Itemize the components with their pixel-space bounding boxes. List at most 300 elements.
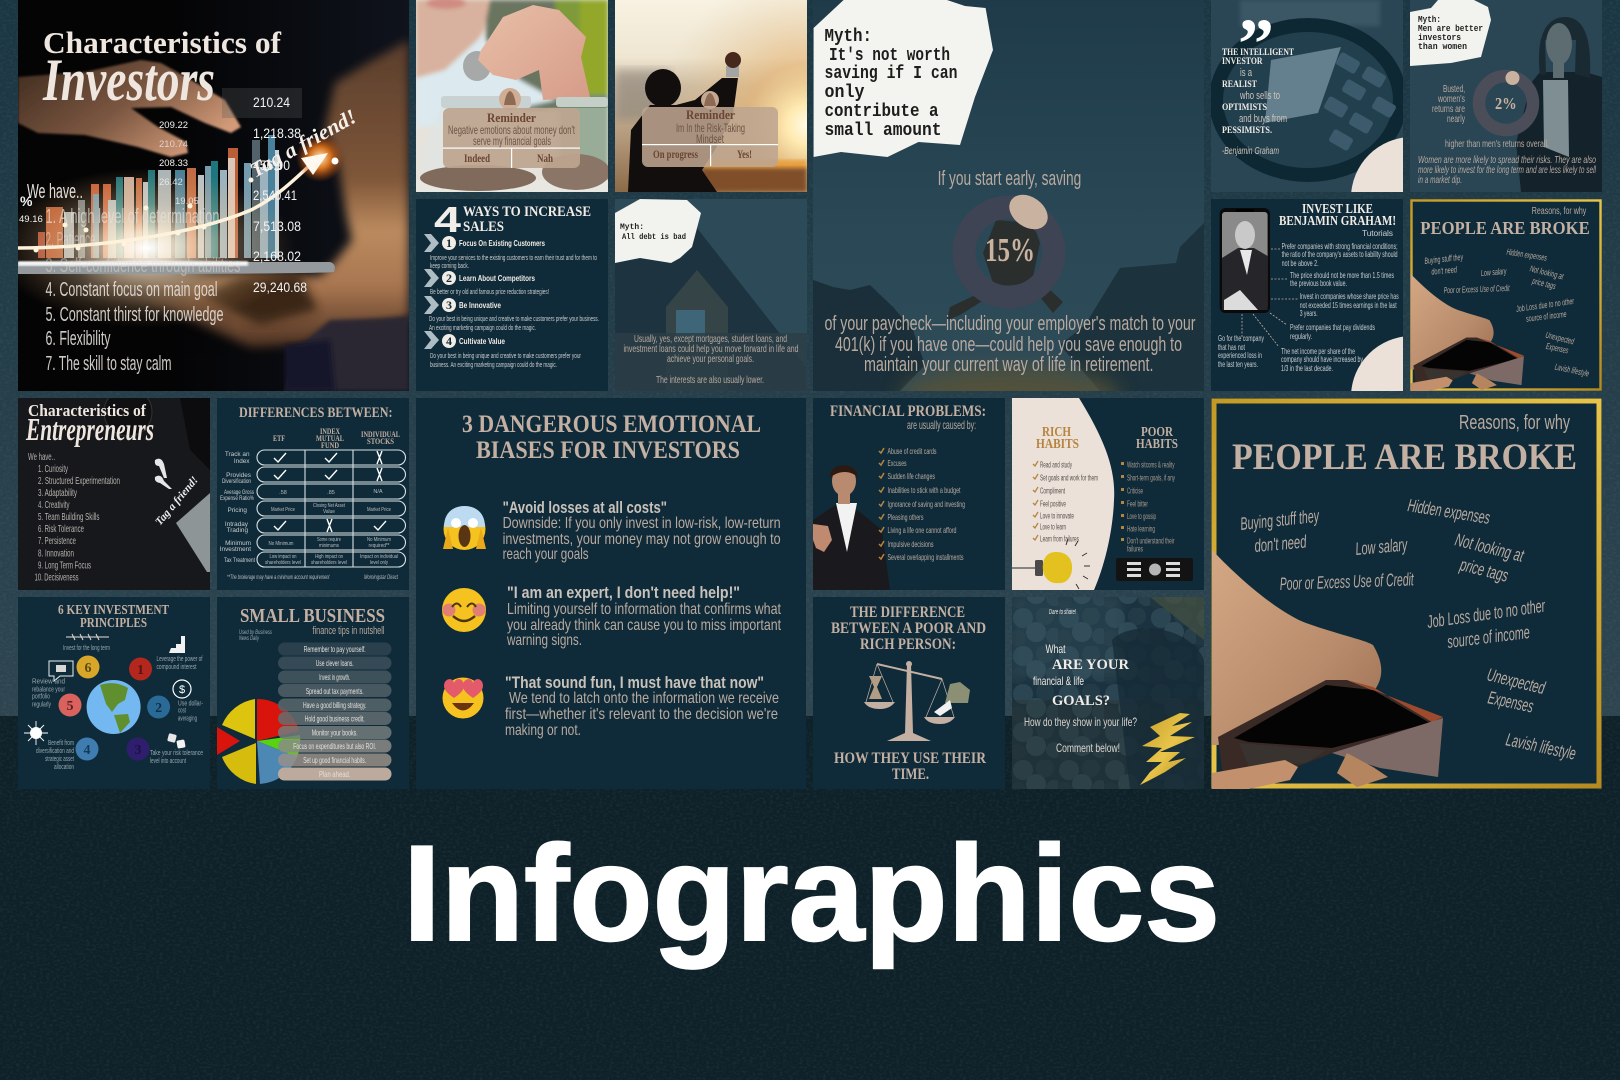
- reasons: don't need: [1254, 531, 1308, 556]
- tag a friend: Tag a friend!: [246, 104, 361, 182]
- heading: Tutorials: [1362, 228, 1393, 238]
- row labels: Diversification: [222, 478, 251, 485]
- phone with portrait: [1220, 208, 1270, 313]
- quote mark: ”: [1238, 4, 1274, 84]
- numbered steps: Be better or try old and famous price reduction strategies!: [430, 289, 549, 296]
- heading: SMALL BUSINESS: [240, 605, 385, 627]
- panel: intelligent investor quote: [1211, 0, 1403, 192]
- quote text: [1222, 48, 1295, 157]
- cell values: Closing Net Asset: [313, 503, 345, 509]
- numbered steps: [429, 236, 599, 369]
- bias one: reach your goals: [503, 546, 589, 563]
- ticker numbers: 7,513.08: [253, 219, 301, 234]
- ticker numbers: [19, 88, 307, 295]
- quote text: who sells to: [1239, 90, 1280, 102]
- headings: [1036, 424, 1178, 451]
- principle labels: Leverage the power of: [156, 656, 203, 663]
- reasons: Expenses: [1486, 687, 1535, 716]
- upper hand: [18, 60, 241, 157]
- text: [1024, 607, 1137, 755]
- heading: News Daily: [239, 635, 259, 642]
- checklist: Living a life one cannot afford: [888, 525, 957, 535]
- rules: The net income per share of the: [1281, 347, 1355, 356]
- cell values: Value: [323, 509, 335, 515]
- headings: HABITS: [1036, 436, 1079, 451]
- bias three: first—whether it's relevant to the decision we're: [505, 706, 778, 723]
- reminder card: On progress: [653, 149, 698, 161]
- cell values: .85: [327, 490, 335, 496]
- numbered steps: 1: [446, 236, 452, 250]
- hand and empty wallet: [1212, 550, 1443, 789]
- numbered steps: An exciting marketing campaign could do the magic.: [429, 325, 536, 332]
- heading: 3 DANGEROUS EMOTIONAL: [462, 411, 761, 438]
- title: Investors: [42, 47, 215, 113]
- corner circle: [1351, 336, 1473, 458]
- footer heading: TIME.: [892, 766, 929, 783]
- heading: Used by Business: [239, 629, 272, 636]
- rules: [1218, 242, 1399, 373]
- numbered steps: 4: [446, 334, 452, 348]
- numbered steps: Learn About Competitors: [459, 273, 535, 283]
- numbered steps: Do your best in being unique and creative to make customers prefer your: [430, 353, 581, 360]
- tip pills: Monitor your books.: [312, 727, 358, 737]
- footnote: **The brokerage may have a minimum account requirement: [227, 574, 330, 581]
- principle labels: compound interest: [156, 664, 197, 671]
- list of characteristics: 1. A high level of determination: [46, 206, 220, 228]
- list: 10. Decisiveness: [35, 572, 79, 584]
- cell values: Market Price: [367, 507, 391, 513]
- heading: Reasons, for why: [1459, 412, 1570, 434]
- rich list: Love to learn: [1040, 523, 1066, 532]
- ticker numbers: 210.74: [159, 139, 188, 150]
- torn paper: [814, 0, 993, 157]
- calculator and lens: [1216, 0, 1400, 175]
- rules: the last ten years.: [1218, 360, 1258, 369]
- panel: myth men are better investors: [1410, 0, 1602, 192]
- quote text: THE INTELLIGENT: [1222, 48, 1295, 58]
- quote text: PESSIMISTS.: [1222, 126, 1272, 136]
- tip pills: Invest in growth.: [319, 672, 350, 682]
- main title: Infographics: [403, 817, 1220, 969]
- row labels: Intraday: [225, 521, 249, 528]
- panel: 4 ways to increase sales: [416, 199, 608, 391]
- heading: DIFFERENCES BETWEEN:: [239, 405, 392, 421]
- list of characteristics: 4. Constant focus on main goal: [46, 279, 218, 301]
- rich list: Compliment: [1040, 487, 1065, 496]
- cell values: Market Price: [271, 507, 295, 513]
- list of characteristics: 5. Constant thirst for knowledge: [46, 304, 224, 326]
- list: 5. Team Building Skills: [38, 511, 100, 523]
- bias one: "Avoid losses at all costs": [503, 498, 667, 517]
- principle labels: Take your risk tolerance: [150, 750, 203, 757]
- rules: Go for the company: [1218, 334, 1265, 343]
- rules: that has not: [1218, 343, 1245, 352]
- quote text: is a: [1240, 67, 1253, 79]
- rules: Invest in companies whose share price has: [1300, 292, 1399, 301]
- heading: BETWEEN A POOR AND: [831, 620, 986, 637]
- reasons: Low salary: [1355, 534, 1409, 559]
- heading: [58, 602, 169, 630]
- checklist: Impulsive decisions: [888, 539, 934, 549]
- reminder card: [642, 91, 778, 167]
- bias two: "I am an expert, I don't need help!": [507, 583, 740, 602]
- heading: PRINCIPLES: [80, 615, 147, 630]
- numbered circles: 4: [84, 743, 90, 758]
- heading: BIASES FOR INVESTORS: [476, 437, 740, 464]
- text: What: [1046, 642, 1066, 656]
- panel: small business finance tips: [217, 597, 409, 789]
- text: [1418, 83, 1596, 186]
- numbered steps: business. An exciting marketing campaign could do the magic.: [430, 362, 557, 369]
- myth text: [1418, 14, 1483, 52]
- reminder card: [443, 88, 580, 168]
- panel: differences between table: [217, 398, 409, 590]
- reminder card: serve my financial goals: [473, 134, 551, 148]
- poor list: [1121, 461, 1175, 554]
- panel: people are broke large: [1211, 398, 1602, 789]
- icon: smiling emoji: [442, 588, 486, 632]
- footer heading: HOW THEY USE THEIR: [834, 750, 987, 767]
- myth statement: It's not worth: [829, 46, 950, 66]
- donut 2 percent: 2%: [1495, 94, 1517, 113]
- bias two: warning signs.: [506, 632, 582, 649]
- myth text: than women: [1418, 41, 1467, 52]
- icon: heart eyes emoji: [442, 678, 484, 718]
- reasons: [1424, 247, 1590, 379]
- ticker numbers: 2,540.41: [253, 188, 297, 203]
- reasons: Hidden expenses: [1506, 247, 1548, 263]
- rules: the ratio of the company's assets to liability should: [1282, 250, 1398, 259]
- list: 9. Long Term Focus: [38, 559, 91, 571]
- quote text: and buys from: [1239, 113, 1287, 125]
- headings: RICH: [1042, 424, 1071, 439]
- myth statement: contribute a: [824, 102, 939, 122]
- rules: experienced loss in: [1218, 351, 1262, 360]
- cell values: [265, 489, 398, 566]
- reminder card: Reminder: [686, 107, 735, 122]
- poor list: Feel bitter: [1127, 499, 1148, 508]
- reasons: [1239, 495, 1578, 764]
- panel: six key investment principles: [18, 597, 210, 789]
- list: [28, 451, 120, 584]
- myth statement: [824, 27, 958, 141]
- reasons: Not looking at: [1529, 263, 1565, 282]
- rules: not be above 2.: [1282, 259, 1319, 268]
- rich list: [1033, 461, 1098, 544]
- reasons: Buying stuff they: [1239, 506, 1321, 534]
- reasons: Not looking at: [1453, 529, 1526, 566]
- reasons: Unexpected: [1545, 330, 1576, 347]
- rules: the previous book value.: [1290, 279, 1347, 288]
- torn paper: All debt is bad: [622, 232, 686, 242]
- list: 7. Persistence: [38, 535, 76, 547]
- ticker numbers: 208.33: [159, 158, 188, 169]
- ticker numbers: 210.24: [253, 95, 290, 110]
- tip pills: Use clever loans.: [316, 658, 354, 668]
- heading: SALES: [463, 219, 504, 235]
- numbered steps: Do your best in being unique and creative to make customers prefer your business.: [429, 316, 599, 323]
- ticker numbers: %: [20, 193, 33, 209]
- pie chart: [217, 699, 300, 784]
- cell values: No Minimum: [268, 541, 294, 547]
- myth text: Myth:: [1418, 14, 1441, 25]
- text: GOALS?: [1052, 693, 1110, 709]
- reasons: Job Loss due to no other: [1425, 596, 1547, 632]
- text: higher than men's returns overall.: [1445, 138, 1549, 150]
- ticker numbers: 456.90: [253, 158, 290, 173]
- heading: INVEST LIKE: [1302, 202, 1373, 217]
- row labels: Expense Ratio%: [220, 495, 254, 502]
- rules: Prefer companies that pay dividends: [1290, 323, 1375, 332]
- headings: HABITS: [1136, 436, 1178, 451]
- reasons: Hidden expenses: [1406, 495, 1491, 528]
- reasons: Expenses: [1545, 341, 1570, 355]
- numbered circles: 3: [134, 743, 142, 758]
- column heads: STOCKS: [367, 436, 394, 446]
- list of characteristics: 3. Self-confidence through abilities: [46, 255, 240, 277]
- table rows: [257, 450, 406, 567]
- numbered circles: 6: [84, 661, 92, 676]
- heading: WAYS TO INCREASE: [463, 204, 591, 220]
- cell values: Impact on individual: [360, 554, 398, 560]
- panel: people are broke small: [1410, 199, 1602, 391]
- bias one: Downside: If you only invest in low-risk, low-return: [503, 515, 781, 532]
- checklist: Excuses: [888, 458, 906, 468]
- torn paper: Myth:: [620, 222, 644, 232]
- title: Characteristics of: [28, 401, 146, 420]
- rich list: Love to innovate: [1040, 512, 1074, 521]
- footer heading: [834, 750, 987, 783]
- rich list: Learn from failures: [1040, 535, 1079, 544]
- reminder card: Yes!: [737, 149, 752, 161]
- numbered steps: Be Innovative: [459, 300, 501, 310]
- cell values: Some require: [317, 537, 341, 543]
- principle labels: portfolio: [32, 694, 50, 701]
- torn paper: [1410, 0, 1491, 66]
- donut 15 percent: 15%: [985, 232, 1035, 269]
- poor list: Criticise: [1127, 487, 1143, 496]
- reasons: price tags: [1531, 276, 1557, 291]
- glow: [0, 168, 296, 328]
- reasons: Poor or Excess Use of Credit: [1444, 283, 1510, 295]
- explanation: [624, 333, 799, 386]
- bias three: "That sound fun, I must have that now": [505, 673, 764, 692]
- myth statement: only: [824, 83, 865, 103]
- quote text: -Benjamin Graham: [1222, 145, 1279, 157]
- headings: POOR: [1141, 424, 1173, 439]
- rich list: Feel positive: [1040, 499, 1066, 508]
- tip pills: Hold good business credit.: [305, 714, 365, 724]
- tag: Tag a friend!: [153, 474, 201, 528]
- checks: [274, 451, 386, 532]
- tip pills: Set up good financial habits.: [303, 755, 366, 765]
- heading: [1420, 206, 1590, 238]
- panel: 3 dangerous emotional biases: [416, 398, 806, 789]
- row labels: Investment: [220, 546, 251, 553]
- column heads: MUTUAL: [316, 433, 344, 443]
- cell values: Low impact on: [270, 554, 296, 560]
- numbered steps: keep coming back.: [430, 263, 469, 270]
- principle labels: Review and: [32, 679, 65, 686]
- heading: 6 KEY INVESTMENT: [58, 602, 169, 617]
- text: returns are: [1432, 103, 1465, 115]
- numbered steps: Cultivate Value: [459, 336, 505, 346]
- quote text: REALIST: [1222, 80, 1258, 90]
- cell values: required**: [368, 543, 390, 549]
- rules: regularly.: [1290, 332, 1312, 341]
- panel: invest like benjamin graham: [1211, 199, 1403, 391]
- numbered circles: 2: [155, 701, 162, 716]
- icon: light bulb: [1012, 539, 1090, 589]
- reminder card: Reminder: [487, 110, 536, 125]
- house: [615, 228, 807, 391]
- list: 8. Innovation: [38, 547, 74, 559]
- globe: [87, 680, 141, 734]
- cell values: High impact on: [315, 554, 343, 560]
- text: in a market dip.: [1418, 174, 1462, 186]
- row labels: Provides: [226, 472, 251, 479]
- heading: THE DIFFERENCE: [850, 604, 965, 621]
- text: Dare to share!: [1049, 607, 1077, 616]
- heading: [462, 411, 761, 464]
- panel: myth saving 15 percent: [813, 0, 1204, 391]
- donut 2 percent: [1479, 71, 1533, 130]
- gold border: [1214, 401, 1599, 786]
- numbered steps: Focus On Existing Customers: [459, 238, 545, 248]
- heading: BENJAMIN GRAHAM!: [1279, 214, 1396, 229]
- row labels: Track an: [225, 451, 250, 458]
- row labels: Pricing: [227, 507, 247, 514]
- rich list: Set goals and work for them: [1040, 474, 1098, 483]
- reasons: Buying stuff they: [1424, 252, 1464, 266]
- poor list: Don't understand their: [1127, 537, 1175, 546]
- list of characteristics: [27, 181, 240, 375]
- principle labels: allocation: [54, 764, 74, 771]
- reminder card: Mindset: [696, 132, 724, 146]
- numbered circles: [58, 656, 170, 760]
- reasons: price tags: [1457, 554, 1510, 586]
- panel: characteristics of entrepreneurs: [18, 398, 210, 590]
- column heads: FUND: [321, 440, 339, 450]
- woman: [1516, 17, 1602, 192]
- heading: [1232, 412, 1577, 478]
- cell values: level only: [370, 560, 388, 566]
- list: 2. Structured Experimentation: [38, 475, 120, 487]
- ticker numbers: 26.42: [159, 177, 183, 188]
- text: nearly: [1447, 113, 1465, 125]
- panel: what are your goals: [1012, 597, 1204, 789]
- bias two: Limiting yourself to information that confirms what: [507, 601, 781, 618]
- tablet: [18, 262, 335, 274]
- myth statement: saving if I can: [824, 64, 958, 84]
- cell values: N/A: [373, 489, 383, 495]
- rules: 1/3 in the last decade.: [1281, 364, 1333, 373]
- column heads: INDEX: [320, 426, 341, 436]
- heading: RICH PERSON:: [860, 636, 956, 653]
- silhouette with raised fist: [628, 52, 741, 192]
- bias two: [506, 583, 781, 649]
- corner circle: [1351, 137, 1473, 259]
- myth statement: Myth:: [824, 27, 872, 47]
- quote text: INVESTOR: [1222, 57, 1263, 67]
- row labels: Tax Treatment: [224, 557, 255, 564]
- poor list: Love to gossip: [1127, 512, 1156, 521]
- ticker numbers: 209.22: [159, 120, 188, 131]
- cell values: shareholders level: [311, 560, 347, 566]
- reminder card: Indeed: [464, 153, 490, 165]
- text: How do they show in your life?: [1024, 715, 1137, 729]
- icons: [24, 634, 191, 749]
- panel: myth all debt is bad: [615, 199, 807, 391]
- cell values: shareholders level: [265, 560, 301, 566]
- rich list: Read and study: [1040, 461, 1072, 470]
- list: 4. Creativity: [38, 499, 70, 511]
- reminder card: Nah: [537, 153, 553, 165]
- text: ARE YOUR: [1052, 657, 1129, 673]
- ticker numbers: 2,168.02: [253, 249, 301, 264]
- rules: 3 years.: [1300, 309, 1318, 318]
- column heads: INDIVIDUAL: [361, 429, 400, 439]
- explanation: [824, 313, 1196, 376]
- title: Characteristics of: [43, 25, 282, 60]
- panel: financial problems: [813, 398, 1005, 590]
- checklist: Abuse of credit cards: [888, 446, 936, 456]
- list: 6. Risk Tolerance: [38, 523, 84, 535]
- rules: The price should not be more than 1.5 times: [1290, 271, 1394, 280]
- bias one: investments, your money may not grow enough to: [503, 531, 781, 548]
- ticker numbers: 1,218.38: [253, 126, 301, 141]
- reminder card: Im In the Risk-Taking: [676, 121, 745, 135]
- row labels: Trading: [227, 527, 248, 534]
- donut 15 percent: [964, 188, 1054, 297]
- heading: [1279, 202, 1396, 238]
- tip pills: [278, 642, 392, 780]
- reasons: source of income: [1446, 622, 1531, 652]
- reasons: don't need: [1431, 264, 1458, 277]
- row labels: Average Gross: [224, 489, 254, 496]
- heading: 4: [434, 199, 461, 240]
- icon: screaming emoji: [443, 506, 486, 550]
- hand with coin: [463, 5, 590, 100]
- list: 3. Adaptability: [38, 487, 77, 499]
- balance scale: [864, 661, 970, 741]
- principle labels: rebalance your: [32, 686, 65, 693]
- myth text: Men are better: [1418, 23, 1483, 34]
- column heads: ETF: [273, 433, 285, 443]
- tip pills: Plan ahead.: [319, 769, 350, 779]
- panel: reminder risk taking: [615, 0, 807, 192]
- rising bar chart: [38, 135, 279, 258]
- numbered circles: 1: [137, 663, 144, 678]
- row labels: [220, 451, 255, 564]
- poor list: Hate learning: [1127, 525, 1155, 534]
- title: [25, 401, 154, 447]
- cell values: No Minimum: [367, 537, 391, 543]
- myth statement: small amount: [824, 121, 942, 141]
- list of characteristics: 2. Patience: [46, 229, 96, 251]
- heading: [831, 604, 986, 653]
- explanation: achieve your personal goals.: [667, 353, 754, 365]
- bias three: making or not.: [505, 722, 581, 739]
- numbered circles: 5: [66, 699, 74, 714]
- numbered steps: 3: [446, 298, 452, 312]
- bias three: [505, 673, 779, 739]
- rules: company should have increased by: [1281, 355, 1364, 364]
- heading: [434, 199, 591, 240]
- tip pills: Remember to pay yourself.: [304, 644, 366, 654]
- heading: [830, 403, 986, 432]
- icon: tv remote: [1116, 558, 1193, 581]
